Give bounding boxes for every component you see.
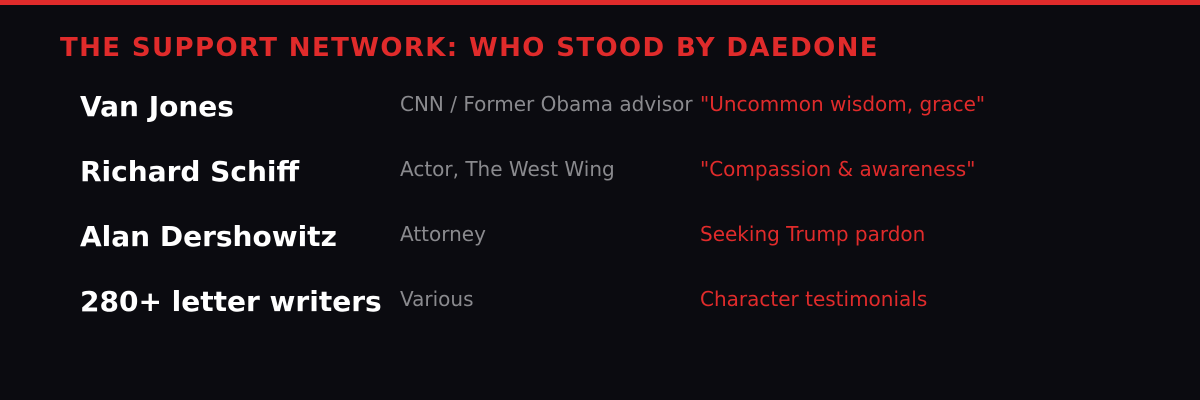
row: Richard Schiff: Actor, The West Wing <box>400 157 615 181</box>
row: letter writers <box>80 285 927 318</box>
row: Van Jones <box>80 90 985 123</box>
row: Alan Dershowitz: Seeking Trump pardon <box>700 222 925 246</box>
row: Richard Schiff: Richard Schiff <box>80 155 299 188</box>
top accent bar <box>0 0 1200 5</box>
row: Van Jones: CNN / Former Obama advisor <box>400 92 693 116</box>
row: Richard Schiff <box>80 155 975 188</box>
row: letter writers: Character testimonials <box>700 287 927 311</box>
row: Alan Dershowitz: Attorney <box>400 222 486 246</box>
row: Alan Dershowitz <box>80 220 925 253</box>
row: letter writers: Various <box>400 287 474 311</box>
row: Alan Dershowitz: Alan Dershowitz <box>80 220 337 253</box>
row: Richard Schiff: "Compassion & awareness" <box>700 157 975 181</box>
row: Van Jones: "Uncommon wisdom, grace" <box>700 92 985 116</box>
row: letter writers: 280+ letter writers <box>80 285 382 318</box>
title: THE SUPPORT NETWORK: WHO STOOD BY DAEDONE <box>60 33 879 63</box>
row: Van Jones: Van Jones <box>80 90 234 123</box>
